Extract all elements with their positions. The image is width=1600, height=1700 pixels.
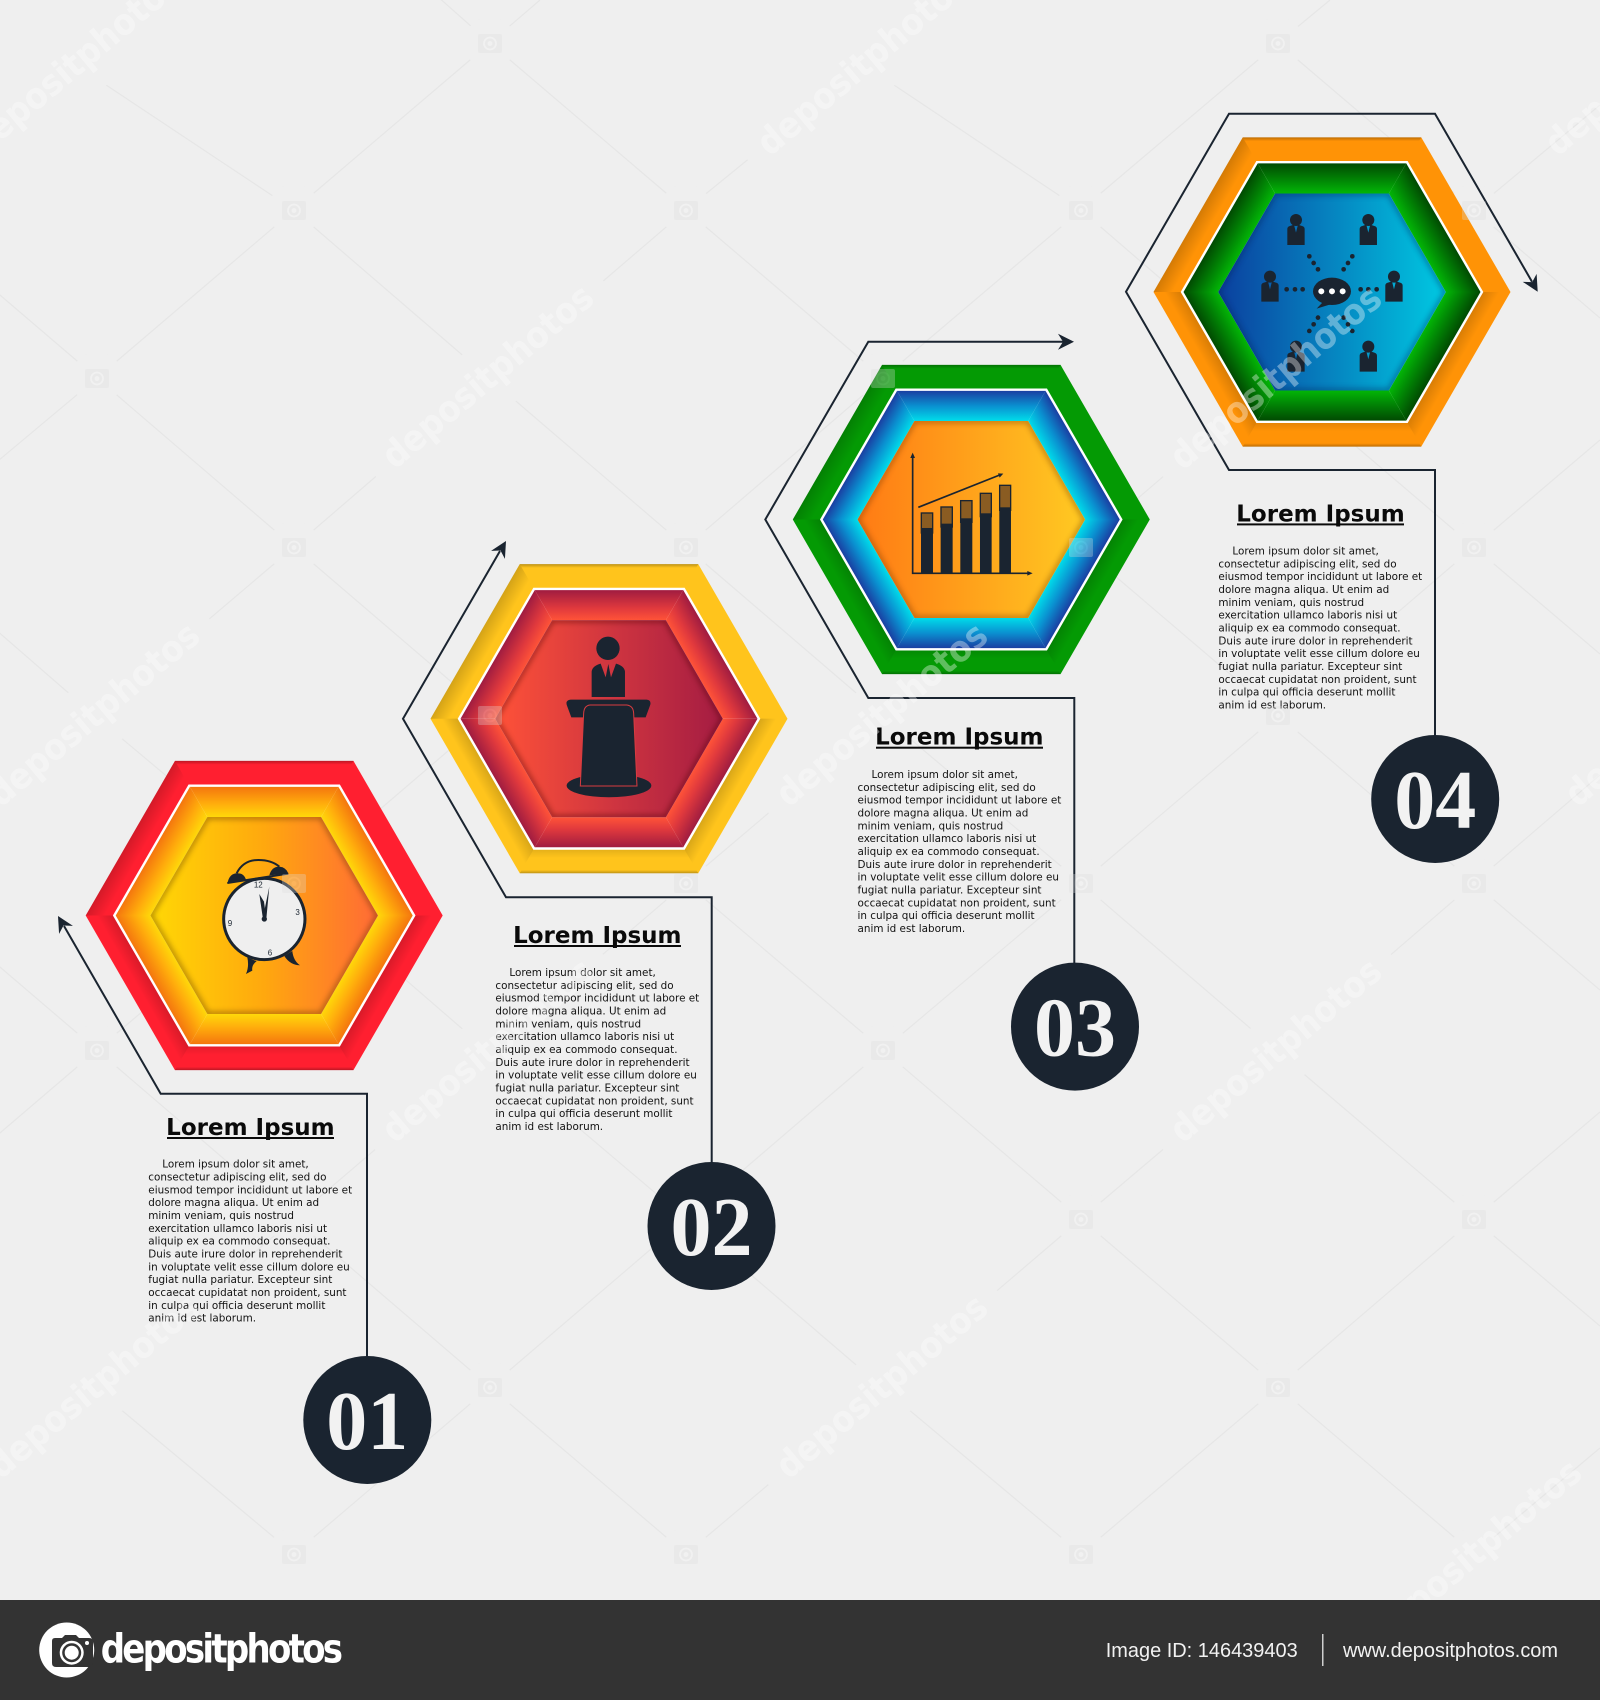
body text 1: in voluptate velit esse cillum dolore eu xyxy=(148,1261,350,1273)
connector line and arrow 4 xyxy=(1126,114,1545,740)
number badge 04 xyxy=(1371,735,1499,863)
footer divider xyxy=(1322,1634,1324,1666)
number badge 02: 02 xyxy=(670,1181,752,1274)
body text 1: exercitation ullamco laboris nisi ut xyxy=(148,1223,327,1235)
body text 3: anim id est laborum. xyxy=(858,923,965,935)
step 2 xyxy=(403,537,788,1290)
body text 1: occaecat cupidatat non proident, sunt xyxy=(148,1287,347,1299)
body text 2: exercitation ullamco laboris nisi ut xyxy=(495,1031,674,1043)
body text 3: in voluptate velit esse cillum dolore eu xyxy=(858,872,1059,884)
body text 1: minim veniam, quis nostrud xyxy=(148,1210,294,1222)
body text 3: minim veniam, quis nostrud xyxy=(858,820,1003,832)
footer website: www.depositphotos.com xyxy=(1342,1640,1558,1662)
icon: alarm clock: 6 xyxy=(268,948,273,957)
body text 1: consectetur adipiscing elit, sed do xyxy=(148,1172,327,1184)
icon: alarm clock xyxy=(224,860,305,974)
body text 3: consectetur adipiscing elit, sed do xyxy=(858,782,1036,794)
watermark overlay: depositphotos xyxy=(374,277,602,477)
watermark overlay: depositphotos xyxy=(768,1287,996,1487)
watermark overlay: depositphotos xyxy=(374,951,602,1151)
body text 3: occaecat cupidatat non proident, sunt xyxy=(858,897,1056,909)
body text 3: Duis aute irure dolor in reprehenderit xyxy=(858,859,1052,871)
heading 1: Lorem Ipsum xyxy=(166,1115,335,1141)
footer bar xyxy=(0,1600,1600,1700)
body text 1: anim id est laborum. xyxy=(148,1313,256,1325)
step 4 xyxy=(1126,114,1545,863)
body text 2: eiusmod tempor incididunt ut labore et xyxy=(495,993,699,1005)
body text 2: minim veniam, quis nostrud xyxy=(495,1018,641,1030)
watermark overlay: depositphotos xyxy=(1162,951,1390,1151)
body text 4: fugiat nulla pariatur. Excepteur sint xyxy=(1218,661,1402,673)
body text 1: eiusmod tempor incididunt ut labore et xyxy=(148,1184,352,1196)
icon: alarm clock: 3 xyxy=(295,908,300,917)
body text 2: in voluptate velit esse cillum dolore eu xyxy=(495,1070,697,1082)
hexagon 2 xyxy=(430,564,788,873)
body text 4: eiusmod tempor incididunt ut labore et xyxy=(1218,571,1422,583)
heading 3: Lorem Ipsum xyxy=(875,725,1044,751)
body text 2 xyxy=(495,967,699,1133)
body text 4: anim id est laborum. xyxy=(1218,700,1326,712)
icon: alarm clock: 9 xyxy=(228,919,233,928)
body text 3: exercitation ullamco laboris nisi ut xyxy=(858,833,1036,845)
body text 4: minim veniam, quis nostrud xyxy=(1218,597,1364,609)
body text 3: eiusmod tempor incididunt ut labore et xyxy=(858,795,1061,807)
heading 2: Lorem Ipsum xyxy=(513,923,682,949)
body text 3: aliquip ex ea commodo consequat. xyxy=(858,846,1040,858)
body text 2: fugiat nulla pariatur. Excepteur sint xyxy=(495,1082,679,1094)
body text 3: Lorem ipsum dolor sit amet, xyxy=(872,769,1018,781)
icon: people network around chat bubble xyxy=(1261,214,1403,372)
body text 2: aliquip ex ea commodo consequat. xyxy=(495,1044,678,1056)
number badge 02 xyxy=(648,1162,776,1290)
body text 4: dolore magna aliqua. Ut enim ad xyxy=(1218,584,1389,596)
body text 2: dolore magna aliqua. Ut enim ad xyxy=(495,1006,666,1018)
step 1 xyxy=(51,761,443,1484)
step 3 xyxy=(765,334,1150,1091)
hexagon 3 xyxy=(793,365,1150,674)
body text 2: in culpa qui officia deserunt mollit xyxy=(495,1108,673,1120)
body text 3 xyxy=(858,769,1061,935)
body text 4: exercitation ullamco laboris nisi ut xyxy=(1218,610,1397,622)
body text 3: dolore magna aliqua. Ut enim ad xyxy=(858,808,1028,820)
body text 1: aliquip ex ea commodo consequat. xyxy=(148,1236,330,1248)
hexagon 4 xyxy=(1153,137,1511,447)
body text 4: in culpa qui officia deserunt mollit xyxy=(1218,687,1396,699)
body text 1 xyxy=(148,1159,352,1325)
connector line and arrow 2 xyxy=(403,537,712,1165)
body text 1: dolore magna aliqua. Ut enim ad xyxy=(148,1197,319,1209)
number badge 01 xyxy=(303,1356,431,1484)
body text 1: fugiat nulla pariatur. Excepteur sint xyxy=(148,1274,332,1286)
body text 4: in voluptate velit esse cillum dolore eu xyxy=(1218,648,1420,660)
icon: alarm clock: 12 xyxy=(254,881,263,890)
body text 2: consectetur adipiscing elit, sed do xyxy=(495,980,674,992)
body text 3: fugiat nulla pariatur. Excepteur sint xyxy=(858,884,1041,896)
connector line and arrow 1 xyxy=(51,912,367,1360)
watermark overlay: depositphotos xyxy=(768,615,996,815)
body text 2: anim id est laborum. xyxy=(495,1121,603,1133)
footer logo mark xyxy=(39,1622,94,1678)
body text 4: Duis aute irure dolor in reprehenderit xyxy=(1218,635,1413,647)
heading 4: Lorem Ipsum xyxy=(1236,501,1405,527)
body text 1: in culpa qui officia deserunt mollit xyxy=(148,1300,325,1312)
connector line and arrow 3 xyxy=(765,334,1074,968)
number badge 03: 03 xyxy=(1034,982,1116,1075)
number badge 03 xyxy=(1011,963,1139,1091)
number badge 04: 04 xyxy=(1394,754,1476,847)
icon: rising bar chart xyxy=(910,453,1033,576)
body text 2: occaecat cupidatat non proident, sunt xyxy=(495,1095,694,1107)
icon: speaker at podium xyxy=(566,637,651,797)
footer logo wordmark: depositphotos xyxy=(101,1626,342,1672)
body text 1: Lorem ipsum dolor sit amet, xyxy=(162,1159,309,1171)
watermark overlay: depositphotos xyxy=(1162,278,1390,478)
body text 4: consectetur adipiscing elit, sed do xyxy=(1218,558,1397,570)
body text 4: Lorem ipsum dolor sit amet, xyxy=(1232,546,1379,558)
body text 4 xyxy=(1218,546,1422,712)
hexagon 1 xyxy=(86,761,443,1070)
body text 2: Lorem ipsum dolor sit amet, xyxy=(509,967,656,979)
body text 3: in culpa qui officia deserunt mollit xyxy=(858,910,1035,922)
body text 4: aliquip ex ea commodo consequat. xyxy=(1218,622,1401,634)
body text 1: Duis aute irure dolor in reprehenderit xyxy=(148,1248,343,1260)
body text 2: Duis aute irure dolor in reprehenderit xyxy=(495,1057,690,1069)
footer image id: Image ID: 146439403 xyxy=(1106,1640,1298,1662)
body text 4: occaecat cupidatat non proident, sunt xyxy=(1218,674,1417,686)
number badge 01: 01 xyxy=(326,1375,408,1468)
